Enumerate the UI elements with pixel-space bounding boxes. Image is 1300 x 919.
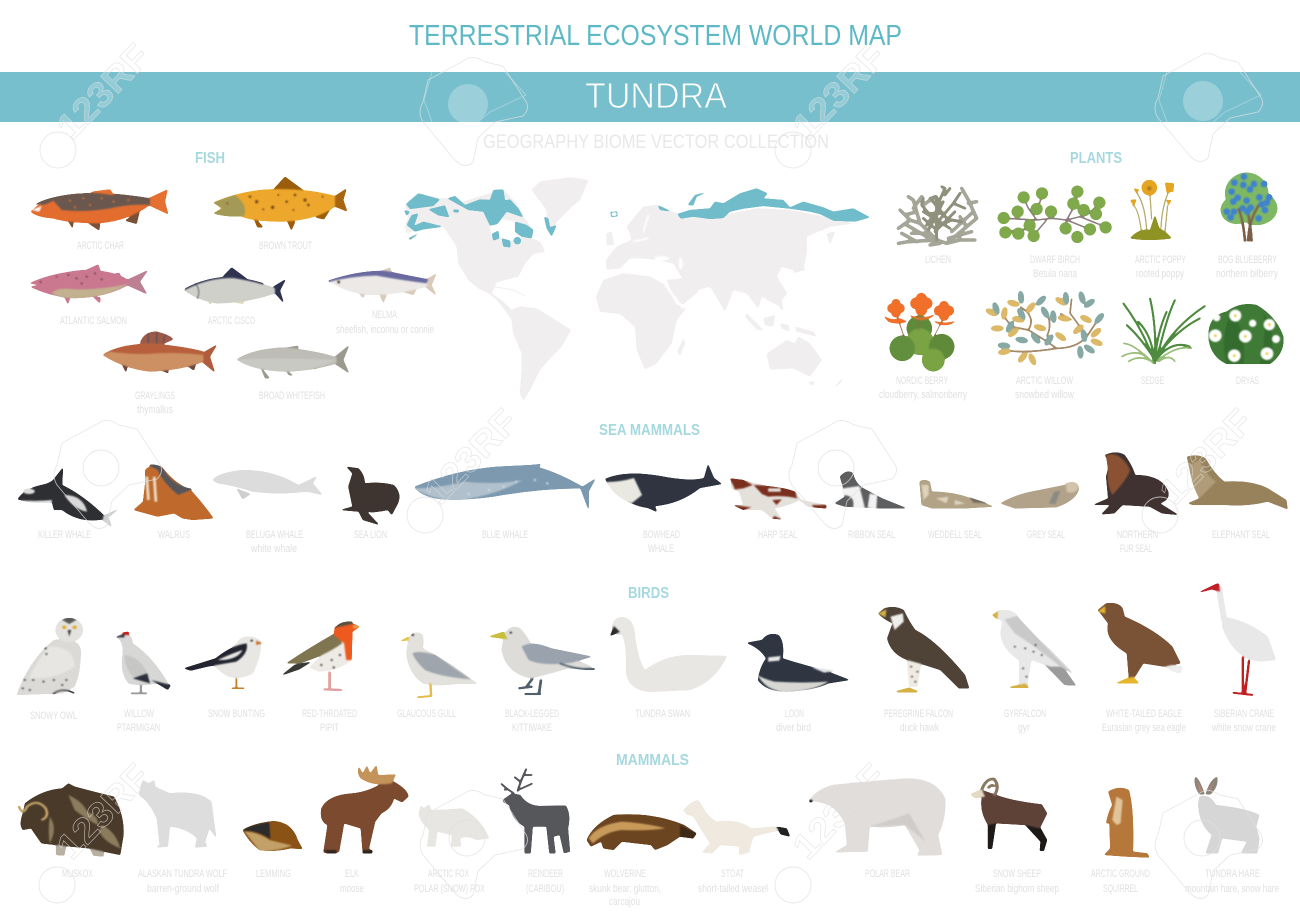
sea mammal: weddell seal: WEDDELL SEAL [928,529,982,541]
fish: graylings: thymallus [137,404,173,416]
plant: dwarf birch: Betula nana [1033,268,1078,280]
mammal: muskox [19,783,124,880]
mammal: wolverine [587,814,697,908]
sea mammal: bowhead whale: BOWHEAD [643,529,680,541]
bird: gyrfalcon [992,610,1076,734]
mammal: arctic fox: ARCTIC FOX [428,868,469,880]
mammal: reindeer [501,768,570,895]
mammal: alaskan tundra wolf: barren-ground wolf [147,883,220,895]
mammal: polar bear: POLAR BEAR [865,868,910,880]
plant: dryas [1208,304,1283,387]
mammal: arctic ground squirrel: SQUIRREL [1103,883,1138,895]
plant: arctic poppy: rooted poppy [1136,268,1184,280]
sea mammal: bowhead whale [605,464,722,555]
mammal: lemming: LEMMING [256,868,291,880]
mammal: tundra hare [1185,777,1279,895]
watermark: 123RF middle right: 123RF [1151,401,1261,512]
plant: dryas: DRYAS [1236,375,1259,387]
plant: arctic willow: ARCTIC WILLOW [1016,375,1073,387]
section: fish [29,150,437,416]
bird: tundra swan [610,617,727,720]
mammal: snow sheep: SNOW SHEEP [993,868,1041,880]
fish: broad whitefish: BROAD WHITEFISH [259,390,325,402]
bird: snowy owl: SNOWY OWL [30,710,77,722]
sea mammal: sea lion: SEA LION [354,529,387,541]
mammal: reindeer: REINDEER [528,868,563,880]
sea mammal: harp seal [730,478,826,541]
plant: nordic berry: NORDIC BERRY [896,375,948,387]
banner: tundra: 123RF [784,36,894,147]
mammal: polar bear [809,778,945,880]
bird: white-tailed eagle [1098,603,1186,734]
mammal: snow sheep: Siberian bighorn sheep [975,883,1059,895]
bird: tundra swan: TUNDRA SWAN [635,708,690,720]
heading: sea mammals: SEA MAMMALS [599,422,700,439]
banner: tundra [0,72,1300,122]
section: birds [17,583,1276,734]
sea mammal: beluga whale: white whale [250,543,297,555]
sea mammal: northern fur seal: NORTHERN [1117,529,1158,541]
mammal: stoat: STOAT [721,868,744,880]
fish: arctic char: ARCTIC CHAR [77,240,124,252]
sea mammal: northern fur seal [1093,452,1179,555]
mammal: elk: ELK [345,868,359,880]
watermark: camera outline, middle right [789,420,897,529]
sea mammal: grey seal [1000,482,1079,541]
mammal: elk: moose [340,883,364,895]
fish: nelma: sheefish, inconnu or connie [336,324,434,336]
mammal: arctic ground squirrel [1091,788,1150,895]
bird: white-tailed eagle: Eurasian grey sea eagle [1102,722,1186,734]
plant: lichen: LICHEN [925,254,951,266]
bird: glaucous gull: GLAUCOUS GULL [397,708,456,720]
watermark: 123RF bottom left: 123RF [48,756,158,867]
section: sea mammals [17,422,1288,555]
watermark: 123RF bottom left [39,756,158,903]
bird: snowy owl [17,618,83,722]
subtitle: GEOGRAPHY BIOME VECTOR COLLECTION [483,132,829,153]
plant: arctic willow: snowbed willow [1015,389,1074,401]
mammal: wolverine: carcajou [609,896,640,908]
mammal: arctic fox: POLAR (SNOW) FOX [414,883,485,895]
mammal: wolverine: skunk bear, glutton, [589,883,661,895]
sea mammal: beluga whale: BELUGA WHALE [246,529,303,541]
plant: sedge: SEDGE [1141,375,1164,387]
mammal: lemming [243,821,303,880]
bird: peregrine falcon: duck hawk [900,722,939,734]
fish: atlantic salmon: ATLANTIC SALMON [60,315,127,327]
sea mammal: walrus: WALRUS [158,529,190,541]
sea mammal: ribbon seal [834,471,907,541]
watermark: camera outline, top right [1155,53,1263,162]
sea mammal: bowhead whale: WHALE [648,543,674,555]
bird: snow bunting: SNOW BUNTING [208,708,265,720]
sea mammal: harp seal: HARP SEAL [758,529,797,541]
bird: red-throated pipit [281,622,361,734]
watermark: 123RF top centre: 123RF [784,36,894,147]
mammal: arctic ground squirrel: ARCTIC GROUND [1091,868,1150,880]
bird: siberian crane [1196,583,1276,734]
heading: fish: FISH [195,150,225,167]
sea mammal: elephant seal [1187,455,1288,541]
mammal: reindeer: (CARIBOU) [526,883,564,895]
sea mammal: northern fur seal: FUR SEAL [1120,543,1152,555]
sea mammal: weddell seal [919,480,994,541]
bird: peregrine falcon: PEREGRINE FALCON [884,708,953,720]
watermark: 123RF middle left: 123RF [416,401,526,512]
fish: broad whitefish [237,345,349,402]
plant: lichen [898,187,977,266]
sea mammal: killer whale: KILLER WHALE [38,529,91,541]
plant: dwarf birch [998,186,1112,280]
sea mammal: killer whale [17,467,119,541]
section: mammals [19,752,1279,908]
fish: graylings: GRAYLINGS [135,390,175,402]
bird: loon: LOON [785,708,804,720]
fish: nelma: NELMA [372,309,397,321]
section: plants [879,150,1283,401]
watermark: 123RF bottom centre: 123RF [784,756,894,867]
mammal: wolverine: WOLVERINE [604,868,646,880]
watermark: camera outline, bottom right [1155,790,1263,899]
plant: bog blueberry [1216,173,1278,280]
sea mammal: grey seal: GREY SEAL [1027,529,1065,541]
sea mammal: blue whale [415,464,596,541]
bird: gyrfalcon: gyr [1018,722,1030,734]
sea mammal: elephant seal: ELEPHANT SEAL [1212,529,1270,541]
plant: arctic willow [985,291,1106,401]
plant: arctic poppy [1130,180,1186,280]
mammal: tundra hare: TUNDRA HARE [1205,868,1260,880]
sea mammal: sea lion [340,467,399,541]
plant: nordic berry: cloudberry, salmonberry [879,389,967,401]
heading: mammals: MAMMALS [616,752,689,769]
watermark: camera outline, bottom centre [420,790,528,899]
watermark: camera outline, middle left [54,420,162,529]
title: TERRESTRIAL ECOSYSTEM WORLD MAP [409,20,902,52]
bird: black-legged kittiwake: KITTIWAKE [512,722,552,734]
plant: arctic poppy: ARCTIC POPPY [1135,254,1186,266]
mammal: snow sheep [970,779,1059,895]
bird: gyrfalcon: GYRFALCON [1004,708,1046,720]
plant: sedge [1122,298,1205,387]
mammal: alaskan tundra wolf [138,780,227,895]
bird: siberian crane: white snow crane [1211,722,1276,734]
sea mammal: beluga whale [212,470,323,555]
mammal: arctic fox [414,804,489,895]
bird: snow bunting [184,636,265,720]
mammal: stoat: short-tailed weasel [698,883,768,895]
banner: tundra: 123RF [48,36,158,147]
banner: tundra: TUNDRA [585,75,727,116]
bird: red-throated pipit: PIPIT [320,722,339,734]
bird: willow ptarmigan [115,632,171,734]
bird: loon: diver bird [776,722,811,734]
sea mammal: walrus [134,465,214,541]
watermark: 123RF bottom centre [775,756,894,903]
fish: arctic cisco [184,267,286,327]
mammal: elk [321,765,408,895]
fish: brown trout [213,177,347,252]
fish: nelma [328,267,437,336]
plant: nordic berry [879,293,967,401]
fish: arctic char [31,189,168,252]
bird: white-tailed eagle: WHITE-TAILED EAGLE [1106,708,1182,720]
bird: black-legged kittiwake [488,627,595,734]
mammal: muskox: MUSKOX [62,868,93,880]
bird: loon [747,634,850,734]
watermark: camera outline, top centre [420,57,528,166]
mammal: stoat [683,800,790,895]
bird: willow ptarmigan: WILLOW [124,708,154,720]
fish: atlantic salmon [29,264,148,327]
mammal: alaskan tundra wolf: ALASKAN TUNDRA WOLF [138,868,227,880]
bird: red-throated pipit: RED-THROATED [302,708,357,720]
fish: brown trout: BROWN TROUT [259,240,312,252]
panel: world map [404,177,870,401]
bird: glaucous gull [397,632,478,720]
bird: willow ptarmigan: PTARMIGAN [117,722,160,734]
sea mammal: blue whale: BLUE WHALE [482,529,528,541]
bird: peregrine falcon [878,607,969,734]
fish: arctic cisco: ARCTIC CISCO [208,315,255,327]
heading: birds: BIRDS [628,585,669,602]
sea mammal: ribbon seal: RIBBON SEAL [848,529,895,541]
plant: dwarf birch: DWARF BIRCH [1030,254,1080,266]
plant: bog blueberry: northern bilberry [1216,268,1278,280]
heading: plants: PLANTS [1070,150,1122,167]
fish: graylings [103,332,217,416]
bird: black-legged kittiwake: BLACK-LEGGED [505,708,559,720]
watermark: 123RF top left: 123RF [48,36,158,147]
